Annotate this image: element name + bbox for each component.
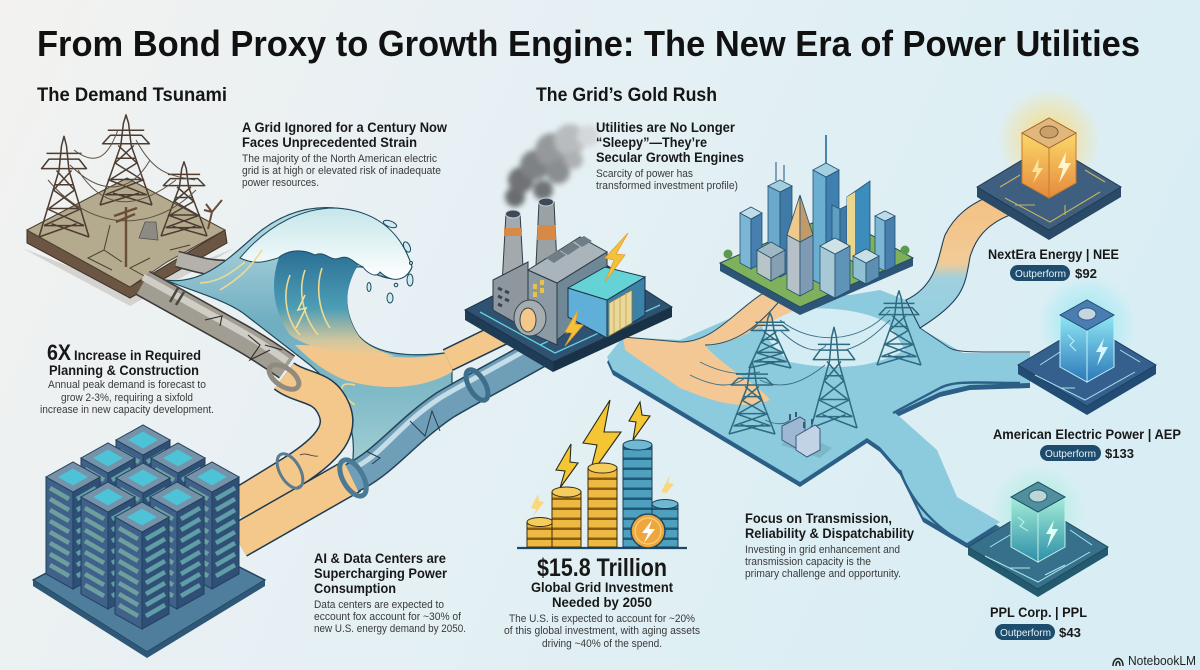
text block: $15.8 trillion (504, 554, 700, 650)
stock label: PPL Corp.: PPL Corp. | PPL (990, 605, 1087, 620)
text block: transmission focus: Reliability & Dispatchability (745, 526, 914, 541)
pipe: upper grey pipe (177, 259, 225, 268)
illustration: data center server racks (33, 425, 265, 658)
text block: secular growth: transformed investment profile) (596, 180, 738, 192)
text block: AI and data centers: AI & Data Centers are (314, 551, 446, 566)
text block: grid strain (242, 120, 447, 189)
text block: $15.8 trillion: $15.8 Trillion (537, 554, 667, 582)
illustration: NextEra battery (977, 88, 1121, 240)
text block: transmission focus: primary challenge and opportunity. (745, 568, 901, 580)
grid platform with orange channel (607, 290, 1030, 548)
text block: secular growth: Utilities are No Longer (596, 120, 736, 135)
text block: transmission focus (745, 511, 914, 580)
illustration: power plant (465, 198, 672, 372)
text block: secular growth: Scarcity of power has (596, 168, 693, 180)
heading: The Grid's Gold Rush: The Grid’s Gold Rush (536, 85, 717, 106)
heading: The Demand Tsunami: The Demand Tsunami (37, 85, 227, 106)
illustration: coin stacks and lightning bolts (517, 400, 687, 548)
text block: $15.8 trillion: The U.S. is expected to account for ~20% (509, 613, 695, 625)
NotebookLM watermark: NotebookLM (1128, 653, 1196, 668)
stock label: American Electric Power: American Electric Power | AEP (993, 427, 1181, 442)
stock label: NextEra Energy (988, 247, 1119, 281)
text block: $15.8 trillion: Global Grid Investment (531, 580, 673, 595)
text block: 6X increase: Increase in Required (74, 348, 201, 363)
text block: $15.8 trillion: of this global investment, with aging assets (504, 625, 700, 637)
text block: AI and data centers: Consumption (314, 581, 396, 596)
stock label: PPL Corp. (990, 605, 1087, 640)
text block: grid strain: power resources. (242, 177, 319, 189)
text block: secular growth: “Sleepy”—They’re (596, 135, 707, 150)
text block: AI and data centers: Data centers are expected to (314, 599, 444, 611)
illustration: city (720, 135, 913, 315)
text block: $15.8 trillion: Needed by 2050 (552, 595, 652, 610)
stock label: American Electric Power: Outperform (1045, 448, 1096, 460)
text block: AI and data centers: Supercharging Power (314, 566, 448, 581)
text block: secular growth (596, 120, 744, 192)
text block: grid strain: The majority of the North American electric (242, 153, 437, 165)
text block: AI and data centers (314, 551, 466, 635)
illustration: smoke (505, 124, 599, 207)
text block: transmission focus: Investing in grid enhancement and (745, 544, 900, 556)
text block: grid strain: Faces Unprecedented Strain (242, 135, 417, 150)
text block: AI and data centers: eccount fox account for ~30% of (314, 611, 462, 623)
illustration: tsunami wave (165, 208, 452, 466)
text block: secular growth: Secular Growth Engines (596, 150, 744, 165)
stock label: NextEra Energy: Outperform (1015, 268, 1066, 280)
text block: grid strain: A Grid Ignored for a Century Now (242, 120, 447, 135)
stock label: American Electric Power: $133 (1105, 446, 1134, 461)
illustration: grid towers and power lines (690, 291, 921, 434)
branch: lower grid branches outlines (893, 382, 1020, 545)
text block: transmission focus: Focus on Transmission, (745, 511, 892, 526)
text block: 6X increase: Annual peak demand is forecast to (48, 379, 206, 391)
pipe: cracked blue pipe into power plant (334, 345, 540, 500)
text block: $15.8 trillion: driving ~40% of the spend. (542, 638, 662, 650)
illustration: AEP battery (1018, 275, 1156, 415)
text block: grid strain: grid is at high or elevated risk of inadequate (242, 165, 441, 177)
text block: 6X increase: grow 2-3%, requiring a sixfold (61, 392, 193, 404)
pipe: orange link from wave to power plant (448, 320, 530, 360)
title: From Bond Proxy to Growth Engine: The New Era of Power Utilities (37, 23, 1140, 64)
text block: 6X increase (40, 340, 214, 416)
pipe: cracked grey main pipe (143, 277, 287, 367)
stock label: NextEra Energy: $92 (1075, 266, 1097, 281)
text block: 6X increase: 6X (47, 340, 71, 365)
text block: 6X increase: Planning & Construction (49, 363, 199, 378)
text block: AI and data centers: new U.S. energy demand by 2050. (314, 623, 466, 635)
illustration: PPL battery (968, 464, 1108, 597)
stock label: American Electric Power (993, 427, 1181, 461)
stock label: PPL Corp.: Outperform (1000, 627, 1051, 639)
text block: 6X increase: increase in new capacity development. (40, 404, 214, 416)
branch: link to NextEra battery (906, 198, 1010, 328)
stock label: NextEra Energy: NextEra Energy | NEE (988, 247, 1119, 262)
pipes: orange power pipes into data center (235, 360, 352, 541)
stock label: PPL Corp.: $43 (1059, 625, 1081, 640)
illustration: cracked ground with aging towers (22, 115, 235, 306)
text block: transmission focus: transmission capacity is the (745, 556, 871, 568)
icon: transformers (781, 412, 832, 458)
